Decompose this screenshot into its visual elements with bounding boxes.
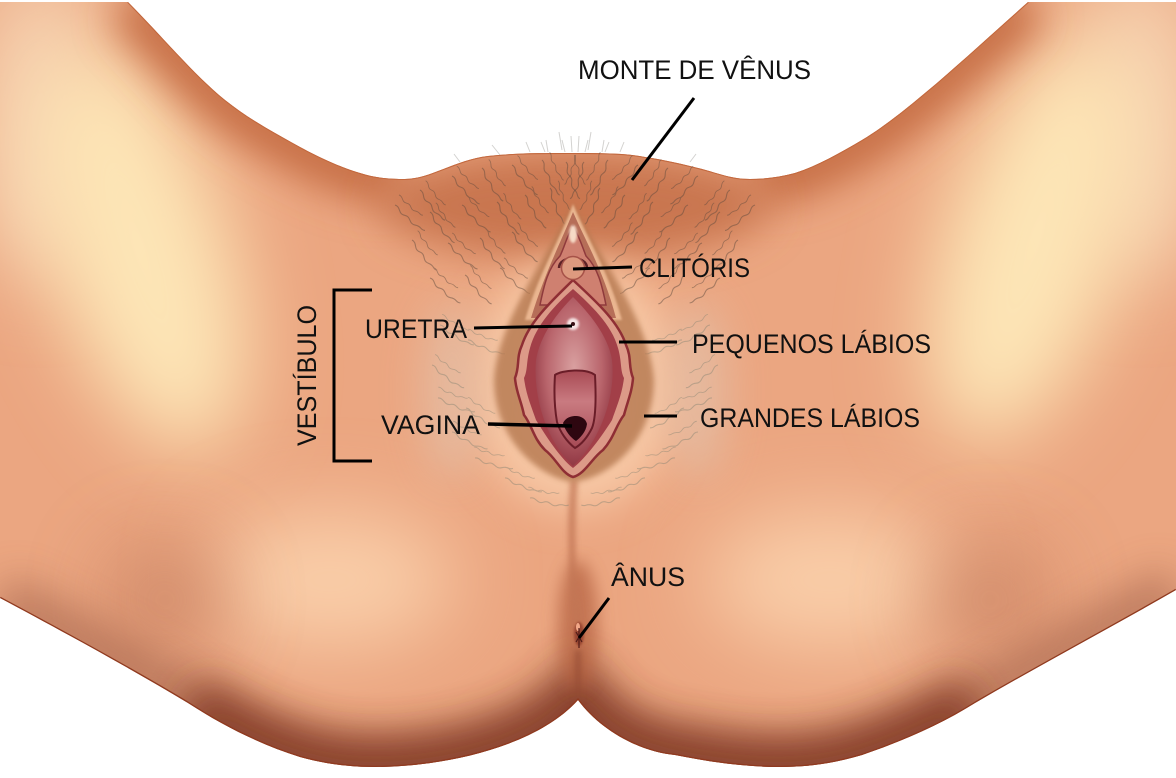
vestibule xyxy=(536,297,613,466)
clitoris xyxy=(559,256,587,280)
label: Ânus: ÂNUS xyxy=(611,562,685,592)
label: Monte de Vênus: MONTE DE VÊNUS xyxy=(578,55,811,85)
labia minora xyxy=(515,280,633,477)
label: Ânus xyxy=(579,562,685,638)
label: Uretra: URETRA xyxy=(365,314,467,344)
upper fold xyxy=(540,226,606,305)
label: Clitóris: CLITÓRIS xyxy=(639,253,750,283)
label: Vagina: VAGINA xyxy=(381,410,480,440)
anus xyxy=(574,622,584,648)
label: Grandes lábios: GRANDES LÁBIOS xyxy=(700,403,920,433)
label: Pequenos lábios: PEQUENOS LÁBIOS xyxy=(692,329,931,359)
bracket: Vestíbulo: VESTÍBULO xyxy=(292,305,322,446)
hair texture xyxy=(392,132,758,514)
vagina opening xyxy=(554,370,596,448)
labia majora contour xyxy=(494,204,654,482)
label: Monte de Vênus xyxy=(578,55,811,180)
bracket: Vestíbulo xyxy=(292,290,372,461)
urethra xyxy=(567,318,579,330)
